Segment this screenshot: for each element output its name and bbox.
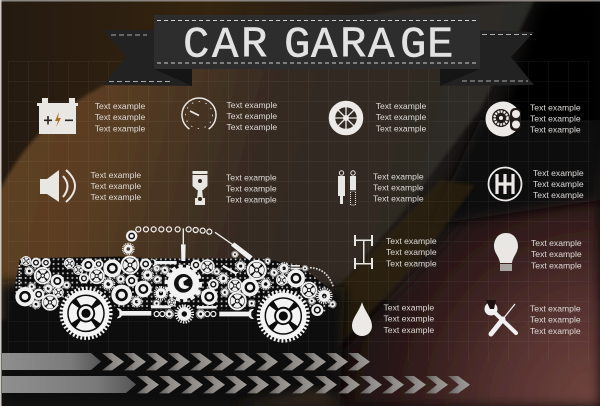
icon: oil drop — [352, 302, 372, 336]
wrenches — [117, 259, 300, 319]
icon: brake disc — [486, 102, 521, 136]
text: piston: Text example — [226, 184, 277, 194]
text: speaker — [90, 170, 141, 202]
icon: shock absorbers — [338, 171, 356, 205]
icon: gear shifter — [488, 168, 522, 200]
text: gear shifter — [533, 168, 584, 200]
text: piston: Text example — [226, 172, 277, 182]
text: wrench and screwdriver: Text example — [530, 326, 581, 336]
text: light bulb: Text example — [531, 238, 582, 248]
grid — [8, 61, 590, 361]
text: speedometer: Text example — [226, 111, 277, 121]
speed arrows bottom — [2, 376, 470, 393]
text: light bulb: Text example — [531, 260, 582, 270]
text: shock absorbers: Text example — [373, 194, 424, 204]
text: wheel: Text example — [376, 101, 427, 111]
icon: light bulb — [494, 233, 518, 271]
text: battery — [95, 101, 146, 134]
icon: battery — [37, 98, 78, 134]
text: shock absorbers: Text example — [373, 172, 424, 182]
text: wrench and screwdriver — [530, 304, 581, 336]
left ribbon tail — [103, 30, 192, 86]
text: speedometer: Text example — [226, 100, 277, 110]
text: wrench and screwdriver: Text example — [530, 304, 581, 314]
text: brake disc: Text example — [530, 102, 581, 112]
text: speaker: Text example — [90, 170, 141, 180]
text: speaker: Text example — [90, 181, 141, 191]
body gears — [17, 231, 336, 315]
front wheel — [61, 288, 111, 338]
text: wheel: Text example — [376, 124, 427, 134]
icon: speedometer — [182, 98, 216, 129]
text: wheel: Text example — [376, 112, 427, 122]
text: axle: Text example — [386, 258, 437, 268]
text: piston — [226, 172, 277, 204]
text: speedometer — [226, 100, 277, 132]
icon: piston — [192, 171, 208, 205]
icon: axle — [354, 235, 373, 269]
screwdrivers — [181, 228, 253, 261]
text: shock absorbers: Text example — [373, 182, 424, 192]
text: speaker: Text example — [90, 192, 141, 202]
underbody gears — [154, 306, 216, 322]
icon: wrench and screwdriver — [484, 300, 516, 334]
text: axle: Text example — [386, 247, 437, 257]
text: oil drop: Text example — [384, 325, 434, 335]
text: oil drop: Text example — [384, 314, 434, 324]
roof chain — [136, 227, 212, 234]
text: oil drop: Text example — [384, 302, 434, 312]
text: piston: Text example — [226, 194, 277, 204]
text: axle: Text example — [386, 236, 437, 246]
text: shock absorbers — [373, 172, 424, 204]
text: brake disc — [530, 102, 581, 134]
icon: speaker — [40, 170, 75, 202]
text: wheel — [376, 101, 427, 134]
rear wheel — [258, 291, 308, 341]
text: axle — [386, 236, 437, 268]
text: gear shifter: Text example — [533, 168, 584, 178]
title ribbon — [103, 15, 534, 86]
right ribbon tail — [440, 30, 534, 86]
speed arrows top — [2, 353, 370, 370]
text: speedometer: Text example — [226, 122, 277, 132]
centre gear with wrench — [166, 266, 201, 301]
text: battery: Text example — [95, 124, 146, 134]
text: gear shifter: Text example — [533, 179, 584, 189]
car body texture — [13, 257, 337, 315]
text: wrench and screwdriver: Text example — [530, 314, 581, 324]
text: oil drop — [384, 302, 434, 335]
text: battery: Text example — [95, 101, 146, 111]
dotted wires — [19, 265, 333, 290]
car made of gears — [13, 227, 337, 341]
text: light bulb — [531, 238, 582, 270]
text: brake disc: Text example — [530, 114, 581, 124]
text: gear shifter: Text example — [533, 190, 584, 200]
text: battery: Text example — [95, 112, 146, 122]
title text: CAR GARAGE — [183, 20, 453, 70]
car body backing — [13, 257, 337, 315]
text: light bulb: Text example — [531, 249, 582, 259]
text: brake disc: Text example — [530, 124, 581, 134]
icon: wheel — [332, 104, 360, 132]
